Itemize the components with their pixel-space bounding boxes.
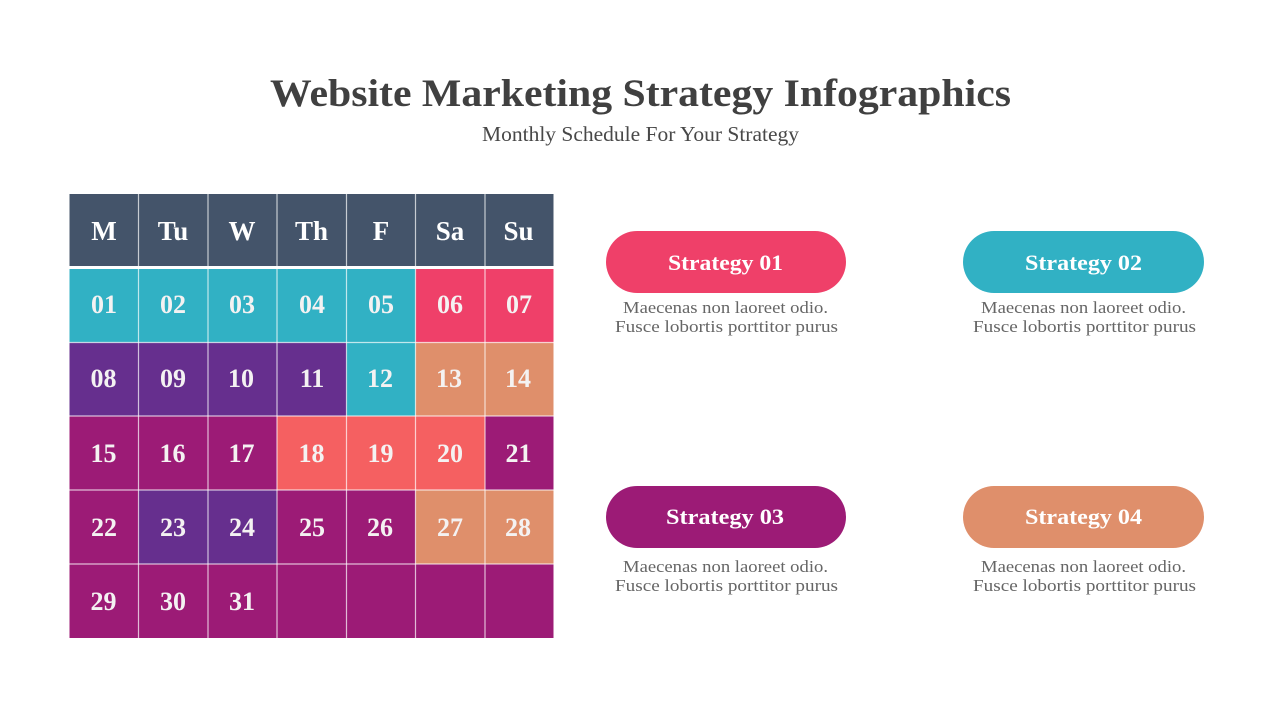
- label: strategy 01: Strategy 01: [668, 250, 783, 275]
- calendar header row: Tu: [158, 216, 188, 246]
- strategy 03: [606, 486, 846, 595]
- calendar grid lines: [70, 194, 554, 638]
- calendar day numbers: 14: [505, 364, 531, 393]
- calendar day numbers: 26: [367, 513, 393, 542]
- description: strategy 03: [615, 557, 838, 595]
- calendar header row: Su: [503, 216, 534, 246]
- calendar day numbers: 27: [437, 513, 463, 542]
- subtitle: Monthly Schedule For Your Strategy: [482, 122, 800, 146]
- calendar day numbers: 16: [160, 439, 186, 468]
- description: strategy 03: Maecenas non laoreet odio.: [623, 557, 828, 576]
- calendar day numbers: 18: [298, 439, 324, 468]
- calendar day numbers: 31: [229, 587, 255, 616]
- calendar day numbers: 24: [229, 513, 255, 542]
- strategy 02: [963, 231, 1204, 336]
- calendar: [70, 194, 554, 638]
- label: strategy 02: Strategy 02: [1025, 250, 1142, 275]
- description: strategy 04: Fusce lobortis porttitor purus: [973, 576, 1196, 595]
- calendar header row: W: [228, 216, 256, 246]
- calendar day numbers: 19: [368, 439, 394, 468]
- calendar day numbers: 23: [160, 513, 186, 542]
- calendar day numbers: 05: [368, 290, 394, 319]
- calendar header row: [70, 194, 554, 266]
- calendar day numbers: [90, 290, 532, 616]
- calendar day numbers: 03: [229, 290, 255, 319]
- calendar day numbers: 12: [367, 364, 393, 393]
- calendar day numbers: 09: [160, 364, 186, 393]
- description: strategy 03: Fusce lobortis porttitor purus: [615, 576, 838, 595]
- pill: strategy 01: [606, 231, 846, 293]
- description: strategy 04: Maecenas non laoreet odio.: [981, 557, 1186, 576]
- calendar day numbers: 29: [90, 587, 116, 616]
- calendar day numbers: 01: [91, 290, 117, 319]
- title: Website Marketing Strategy Infographics: [270, 72, 1011, 115]
- calendar header row: Sa: [436, 216, 465, 246]
- calendar day numbers: 21: [506, 439, 532, 468]
- calendar header row: M: [91, 216, 117, 246]
- calendar day numbers: 11: [300, 364, 324, 393]
- description: strategy 02: [973, 298, 1196, 336]
- calendar header row: Th: [295, 216, 328, 246]
- calendar day numbers: 02: [160, 290, 186, 319]
- calendar day numbers: 15: [90, 439, 116, 468]
- calendar day numbers: 04: [299, 290, 325, 319]
- label: strategy 04: Strategy 04: [1025, 504, 1142, 529]
- calendar day numbers: 28: [505, 513, 531, 542]
- pill: strategy 04: [963, 486, 1204, 548]
- description: strategy 01: Maecenas non laoreet odio.: [623, 298, 828, 317]
- calendar day numbers: 30: [160, 587, 186, 616]
- calendar day numbers: 08: [90, 364, 116, 393]
- pill: strategy 03: [606, 486, 846, 548]
- pill: strategy 02: [963, 231, 1204, 293]
- calendar day numbers: 17: [228, 439, 254, 468]
- label: strategy 03: Strategy 03: [666, 504, 784, 529]
- calendar day numbers: 07: [506, 290, 532, 319]
- calendar day cells: [70, 269, 554, 638]
- description: strategy 04: [973, 557, 1196, 595]
- calendar day numbers: 25: [299, 513, 325, 542]
- strategy 01: [606, 231, 846, 336]
- description: strategy 01: Fusce lobortis porttitor purus: [615, 317, 838, 336]
- calendar day numbers: 10: [228, 364, 254, 393]
- calendar day numbers: 13: [436, 364, 462, 393]
- description: strategy 02: Maecenas non laoreet odio.: [981, 298, 1186, 317]
- calendar day numbers: 20: [437, 439, 463, 468]
- description: strategy 02: Fusce lobortis porttitor purus: [973, 317, 1196, 336]
- calendar day numbers: 06: [437, 290, 463, 319]
- calendar day numbers: 22: [91, 513, 117, 542]
- calendar header row: F: [373, 216, 389, 246]
- strategy 04: [963, 486, 1204, 595]
- description: strategy 01: [615, 298, 838, 336]
